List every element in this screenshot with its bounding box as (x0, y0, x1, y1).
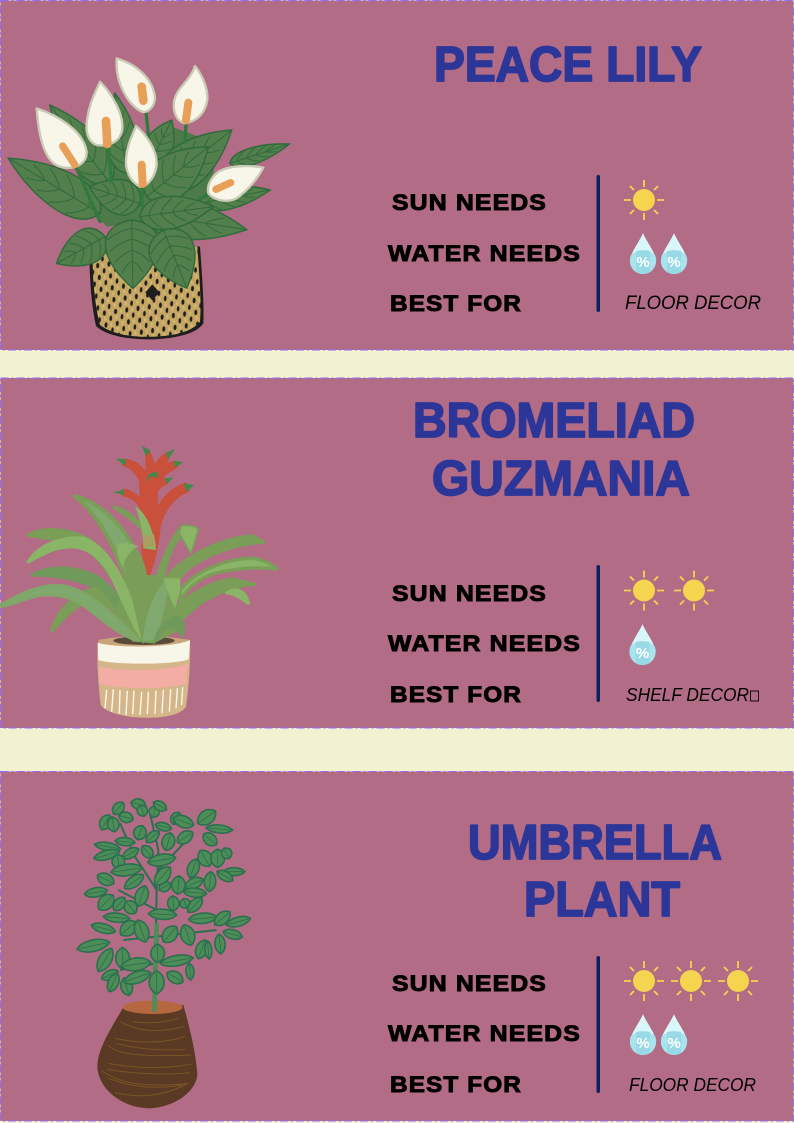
icon: water drop: % (667, 254, 681, 271)
title (413, 394, 695, 506)
icon: water drop: % (636, 1035, 650, 1052)
label: best for: BEST FOR (390, 682, 522, 707)
label: water needs: WATER NEEDS (388, 241, 581, 266)
title: GUZMANIA (432, 452, 690, 506)
icon: sun (674, 570, 714, 610)
icon: water drop: % (636, 254, 650, 271)
panel: peace lily (0, 0, 793, 350)
panel: umbrella plant (0, 772, 794, 1121)
icon: water drop (661, 233, 687, 274)
icon: water drop (630, 1014, 656, 1055)
title (468, 816, 722, 927)
icon: water drop (630, 233, 656, 274)
title: BROMELIAD (413, 394, 695, 448)
label: best for: BEST FOR (390, 291, 522, 316)
illustration: bromeliad (0, 446, 277, 718)
divider bar (596, 956, 600, 1093)
divider bar (596, 565, 600, 702)
title: UMBRELLA (468, 816, 722, 870)
label: sun needs: SUN NEEDS (392, 581, 547, 606)
text: shelf decor: SHELF DECOR (626, 685, 749, 705)
label: best for: BEST FOR (390, 1072, 522, 1097)
text: floor decor: FLOOR DECOR (625, 293, 761, 314)
icon: sun (718, 961, 758, 1001)
panel: bromeliad guzmania (0, 378, 794, 728)
title: PLANT (524, 873, 680, 927)
icon: water drop: % (667, 1035, 681, 1052)
divider bar (596, 175, 600, 312)
label: sun needs: SUN NEEDS (392, 971, 547, 996)
illustration: peace lily (0, 58, 292, 339)
icon: water drop (661, 1014, 687, 1055)
label: sun needs: SUN NEEDS (392, 190, 547, 215)
icon: sun (624, 570, 664, 610)
icon: sun (624, 961, 664, 1001)
icon: sun (671, 961, 711, 1001)
label: water needs: WATER NEEDS (388, 631, 581, 656)
text: floor decor: FLOOR DECOR (629, 1075, 756, 1095)
icon: sun (624, 180, 664, 220)
title: PEACE LILY (434, 38, 702, 92)
icon: water drop: % (636, 645, 649, 662)
illustration: umbrella plant (76, 798, 252, 1108)
label: water needs: WATER NEEDS (388, 1021, 581, 1046)
icon: water drop (630, 624, 656, 665)
